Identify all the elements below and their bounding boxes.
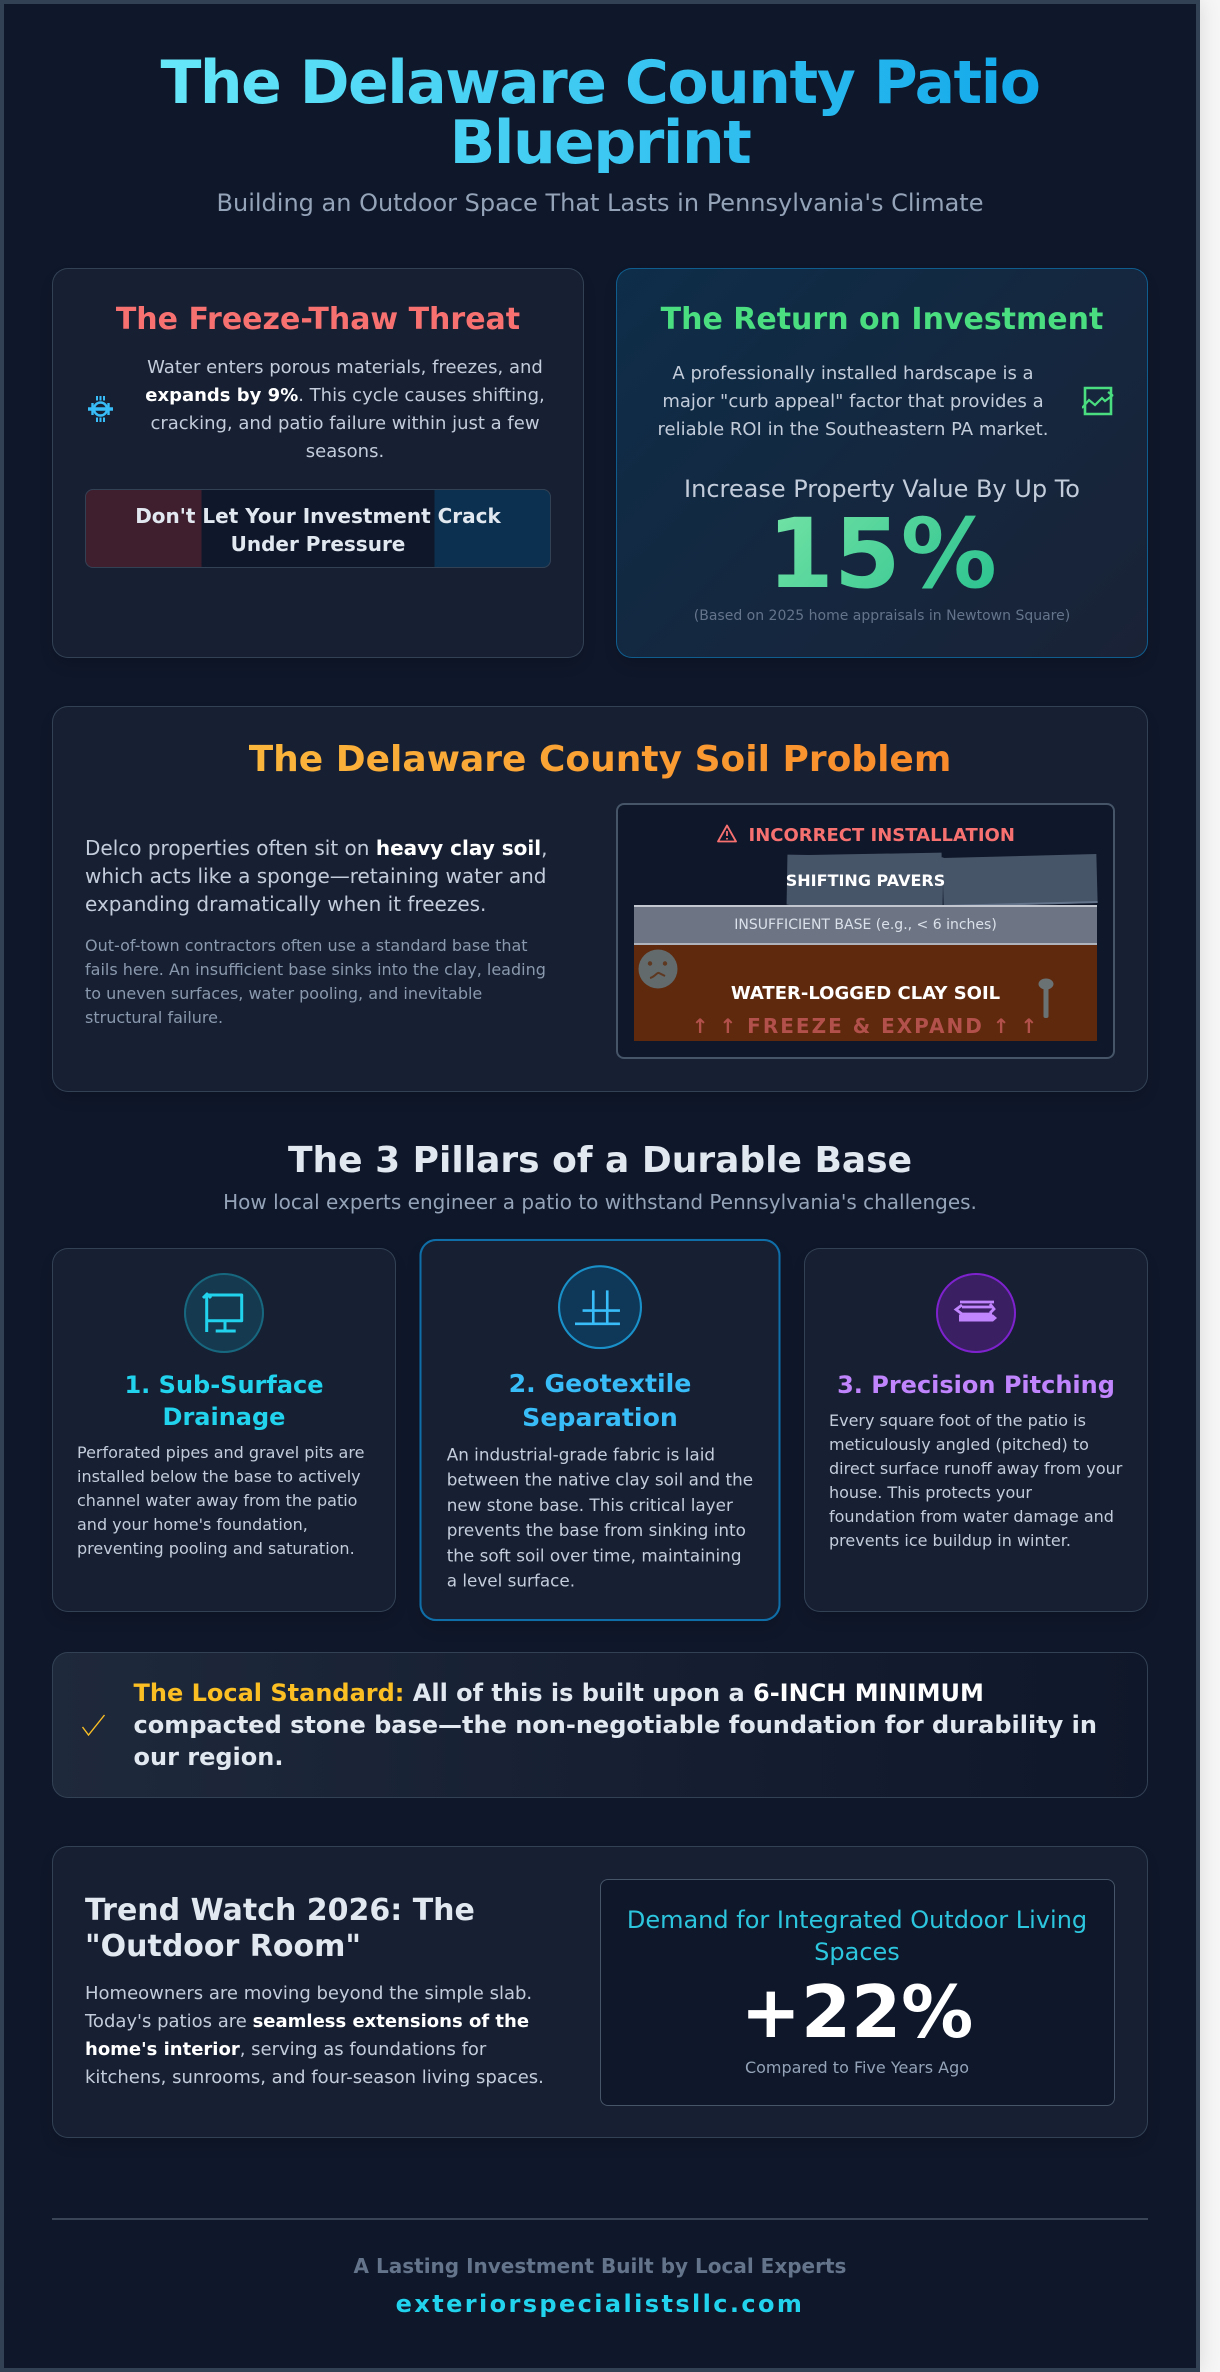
text: heavy clay soil: Delco properties often sit on heavy clay soil, — [85, 836, 547, 860]
subheading: three pillars: How local experts engineer a patio to withstand Pennsylvania's challenges. — [223, 1190, 977, 1214]
title: The Delaware County Patio — [160, 48, 1040, 118]
heading: geotextile separation: 2. Geotextile — [509, 1369, 691, 1398]
layer: insufficient base — [634, 905, 1097, 945]
heading: soil problem: The Delaware County Soil Problem — [249, 739, 951, 780]
text: out-of-town contractors: structural failure. — [85, 1008, 223, 1027]
text: pitching: foundation from water damage and — [829, 1507, 1114, 1526]
text: ROI explanation: A professionally installed hardscape is a — [672, 363, 1034, 384]
heading: geotextile separation: Separation — [522, 1403, 678, 1432]
stat box: outdoor living demand — [600, 1879, 1115, 2106]
heading: sub-surface drainage — [124, 1371, 324, 1431]
text: freeze-thaw explanation — [145, 356, 545, 462]
text: drainage: channel water away from the patio — [77, 1491, 357, 1510]
text: geotextile: prevents the base from sinking into — [447, 1520, 746, 1540]
text: geotextile: the soft soil over time, maintaining — [447, 1545, 741, 1565]
layer: clay soil — [634, 945, 1097, 1041]
text: six-inch minimum: The Local Standard: All of this is built upon a 6-INCH MINIMUM — [134, 1679, 984, 1707]
paver: right — [942, 854, 1098, 907]
heading: freeze-thaw threat: The Freeze-Thaw Threat — [116, 302, 520, 337]
panel: precision pitching — [804, 1248, 1148, 1612]
title — [160, 48, 1040, 178]
icon: drainage — [184, 1273, 264, 1353]
text: trend explanation: Today's patios are seamless extensions of the — [85, 2011, 529, 2032]
text: geotextile — [446, 1444, 753, 1590]
text: heavy clay soil — [85, 836, 547, 916]
heading: trend watch — [85, 1893, 475, 1964]
text: out-of-town contractors: to uneven surfaces, water pooling, and inevitable — [85, 984, 482, 1003]
stat: +22%: +22% — [741, 1970, 973, 2054]
text: freeze-thaw explanation: Water enters porous materials, freezes, and — [147, 356, 543, 378]
heading: precision pitching: 3. Precision Pitching — [837, 1371, 1115, 1399]
text: out-of-town contractors: fails here. An insufficient base sinks into the clay, leading — [85, 960, 546, 979]
text: drainage: installed below the base to actively — [77, 1467, 361, 1486]
text: freeze-thaw explanation: cracking, and patio failure within just a few — [150, 412, 540, 434]
text: geotextile: new stone base. This critical layer — [447, 1495, 733, 1515]
label: shifting pavers: SHIFTING PAVERS — [786, 871, 945, 890]
panel: sub-surface drainage — [52, 1248, 396, 1612]
text: trend explanation: home's interior, serving as foundations for — [85, 2039, 486, 2060]
footer: tagline: A Lasting Investment Built by Local Experts — [354, 2254, 846, 2278]
text: trend explanation: kitchens, sunrooms, and four-season living spaces. — [85, 2067, 544, 2088]
panel: trend watch — [52, 1846, 1148, 2138]
text: trend explanation — [84, 1983, 544, 2088]
text: pitching — [829, 1411, 1122, 1550]
heading: sub-surface drainage: 1. Sub-Surface — [124, 1371, 324, 1399]
footer: website: exteriorspecialistsllc.com — [396, 2290, 804, 2318]
panel: freeze-thaw threat — [52, 268, 584, 658]
heading: geotextile separation — [509, 1369, 691, 1432]
heading: trend watch: "Outdoor Room" — [85, 1929, 361, 1964]
text: pitching: direct surface runoff away from your — [829, 1459, 1122, 1478]
banner: don't let your investment crack — [85, 489, 551, 568]
paver: left overlap — [788, 853, 942, 905]
text: pitching: Every square foot of the patio is — [829, 1411, 1086, 1430]
icon: pitching — [936, 1273, 1016, 1353]
callout: the local standard — [52, 1652, 1148, 1798]
text: ROI explanation: reliable ROI in the Southeastern PA market. — [658, 419, 1048, 440]
label: increase property value: Increase Property Value By Up To — [684, 475, 1080, 503]
label: freeze and expand: ↑ ↑ FREEZE & EXPAND ↑ ↑ — [692, 1014, 1039, 1038]
label: demand: Demand for Integrated Outdoor Living — [627, 1906, 1087, 1934]
panel: soil problem — [52, 706, 1148, 1092]
text: pitching: house. This protects your — [829, 1483, 1032, 1502]
text: freeze-thaw explanation: expands by 9%. This cycle causes shifting, — [145, 384, 545, 406]
text: geotextile: An industrial-grade fabric is laid — [447, 1444, 715, 1464]
text: drainage — [77, 1443, 364, 1558]
note: appraisal source: (Based on 2025 home appraisals in Newtown Square) — [694, 608, 1070, 624]
text: drainage: and your home's foundation, — [77, 1515, 308, 1534]
icon: warning triangle — [717, 824, 737, 842]
icon: water pin — [1038, 978, 1054, 1018]
text: six-inch minimum: compacted stone base—the non-negotiable foundation for durability in — [134, 1711, 1097, 1739]
text: six-inch minimum — [134, 1679, 1097, 1771]
icon: geotextile — [558, 1265, 642, 1349]
text: six-inch minimum: our region. — [134, 1743, 283, 1771]
label: water-logged clay soil: WATER-LOGGED CLAY SOIL — [731, 983, 1000, 1004]
heading: three pillars: The 3 Pillars of a Durable Base — [288, 1140, 912, 1181]
label: incorrect installation: INCORRECT INSTALLATION — [748, 825, 1015, 846]
heading: return on investment: The Return on Investment — [661, 302, 1103, 337]
text: geotextile: between the native clay soil and the — [447, 1469, 753, 1489]
title: Blueprint — [450, 108, 750, 178]
icon: sad face — [638, 950, 678, 988]
label: demand: Spaces — [814, 1938, 900, 1966]
text: pitching: meticulously angled (pitched) to — [829, 1435, 1089, 1454]
heading: trend watch: Trend Watch 2026: The — [85, 1893, 475, 1928]
icon: rising chart — [1082, 386, 1114, 416]
subtitle: Building an Outdoor Space That Lasts in Pennsylvania's Climate — [217, 189, 983, 217]
text: pitching: prevents ice buildup in winter. — [829, 1531, 1071, 1550]
icon: snowflake — [88, 396, 113, 422]
icon: check mark — [82, 1714, 105, 1736]
heading: sub-surface drainage: Drainage — [163, 1403, 285, 1431]
diagram: incorrect installation — [616, 803, 1115, 1059]
paver: left — [787, 855, 943, 907]
text: freeze-thaw explanation: seasons. — [306, 440, 384, 462]
text: out-of-town contractors — [85, 936, 546, 1027]
text: drainage: preventing pooling and saturation. — [77, 1539, 355, 1558]
banner: don't let your investment crack: Don't Let Your Investment Crack — [135, 504, 501, 528]
label: demand — [627, 1906, 1087, 1966]
banner: don't let your investment crack: Under Pressure — [231, 532, 405, 556]
text: heavy clay soil: which acts like a sponge—retaining water and — [85, 864, 546, 888]
panel: geotextile separation — [419, 1239, 781, 1621]
note: comparison: Compared to Five Years Ago — [745, 2058, 969, 2077]
text: ROI explanation: major "curb appeal" factor that provides a — [662, 391, 1044, 412]
text: heavy clay soil: expanding dramatically when it freezes. — [85, 892, 486, 916]
text: trend explanation: Homeowners are moving beyond the simple slab. — [85, 1983, 532, 2004]
text: out-of-town contractors: Out-of-town contractors often use a standard base that — [85, 936, 528, 955]
stat: 15%: 15% — [767, 498, 997, 610]
layer: insufficient base: INSUFFICIENT BASE (e.g., < 6 inches) — [734, 917, 997, 933]
panel: return on investment — [616, 268, 1148, 658]
text: geotextile: a level surface. — [447, 1570, 575, 1590]
text: ROI explanation — [658, 363, 1048, 440]
text: drainage: Perforated pipes and gravel pits are — [77, 1443, 364, 1462]
